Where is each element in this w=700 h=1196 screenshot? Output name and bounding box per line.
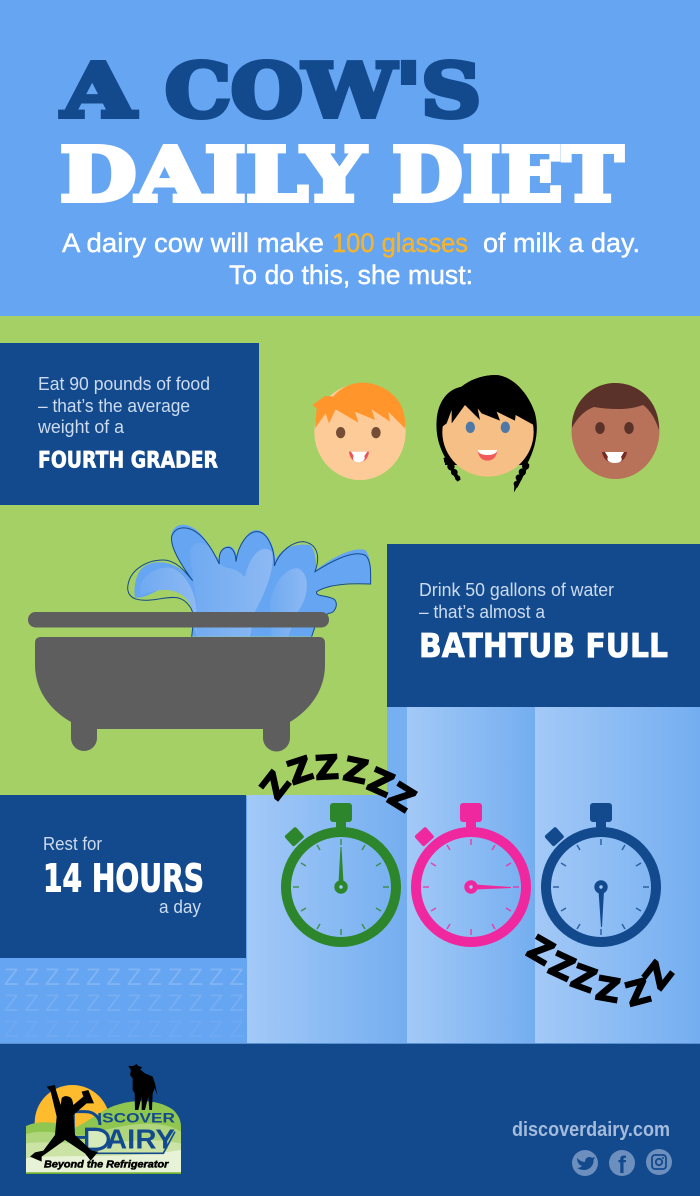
panel: rest [0, 795, 246, 958]
bottom sleeping z letters: Z [636, 954, 681, 997]
subtitle [62, 228, 640, 290]
title: DAILY [60, 132, 366, 218]
title: COW'S [165, 48, 481, 134]
title: A [61, 48, 137, 134]
icon: boy with orange hair [312, 383, 406, 480]
panel: drink: BATHTUB FULL [419, 626, 668, 665]
bottom sleeping z letters: Z [543, 944, 581, 989]
panel: eat: weight of a [37, 417, 125, 437]
icon: water splash [128, 525, 371, 637]
green background [0, 316, 700, 796]
logo: Discover Dairy [26, 1064, 181, 1174]
bottom sleeping z letters: Z [566, 956, 602, 1001]
gradient strips [247, 707, 700, 1043]
website url: discoverdairy.com [512, 1119, 670, 1141]
panel: rest: Rest for [43, 834, 102, 854]
top sleeping z letters: Z [381, 775, 422, 820]
z pattern: ZZZZZZZZZZZZ [4, 1016, 244, 1043]
subtitle: 100 glasses [332, 228, 468, 258]
z pattern: ZZZZZZZZZZZZ [4, 990, 244, 1017]
panel: eat: FOURTH GRADER [38, 448, 218, 474]
icon: girl with black braids [436, 375, 537, 492]
panel: drink: – that’s almost a [419, 602, 546, 622]
top sleeping z letters [253, 747, 422, 820]
z pattern: ZZZZZZZZZZZZ [4, 964, 244, 991]
icon: pink stopwatch [414, 803, 526, 942]
subtitle: To do this, she must: [229, 260, 473, 290]
title: DIET [392, 132, 623, 218]
panel: rest: 14 HOURS [43, 856, 204, 900]
bottom sleeping z letters [521, 928, 681, 1014]
icon: instagram [646, 1149, 672, 1175]
top sleeping z letters: Z [253, 764, 298, 807]
icon: twitter [572, 1150, 598, 1176]
top sleeping z letters: Z [340, 749, 372, 792]
logo: Discover Dairy: Beyond the Refrigerator [44, 1159, 170, 1170]
bottom sleeping z letters: Z [521, 928, 561, 973]
top sleeping z letters: Z [362, 760, 400, 805]
title [60, 48, 623, 218]
bottom sleeping z letters: Z [593, 968, 623, 1011]
icon: green stopwatch [284, 803, 396, 942]
panel: eat [0, 343, 259, 505]
panel: eat: – that’s the average [38, 396, 190, 416]
bottom sleeping z letters: Z [622, 971, 655, 1014]
panel: drink [387, 544, 700, 707]
footer [0, 1043, 700, 1196]
panel: rest: a day [159, 897, 201, 917]
logo: Discover Dairy: ISCOVER [97, 1110, 175, 1126]
panel: drink: Drink 50 gallons of water [419, 580, 614, 600]
z pattern [0, 958, 246, 1043]
panel: eat: Eat 90 pounds of food [38, 374, 210, 394]
icon: bathtub [28, 612, 329, 752]
top sleeping z letters: Z [283, 748, 318, 793]
icon: facebook: f [618, 1152, 627, 1179]
subtitle: A dairy cow will make [62, 228, 324, 258]
logo: Discover Dairy: AIRY [106, 1123, 175, 1154]
header background [0, 0, 700, 316]
icon: facebook [609, 1150, 635, 1179]
icon: blue stopwatch [544, 803, 656, 942]
icon: boy with brown hair [572, 383, 660, 479]
top sleeping z letters: Z [314, 747, 340, 788]
subtitle: of milk a day. [483, 228, 640, 258]
